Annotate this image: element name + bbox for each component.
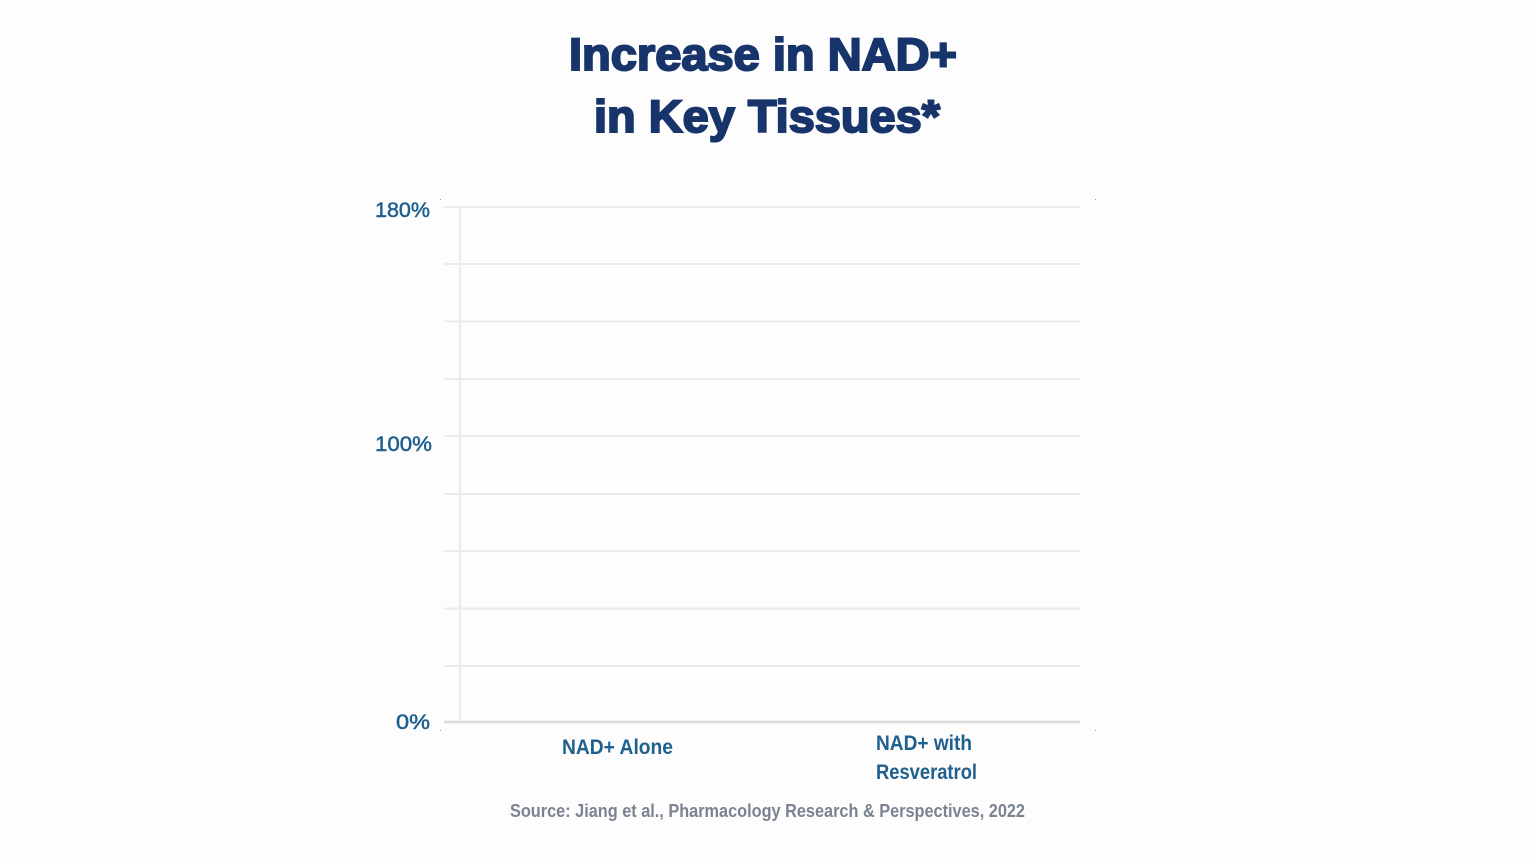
y-axis labels — [375, 199, 432, 734]
title — [569, 29, 957, 142]
y-axis labels: 100% — [375, 433, 432, 456]
y-axis labels: 0% — [396, 711, 430, 734]
title: in Key Tissues* — [594, 91, 940, 142]
x-axis label: NAD+ Alone: NAD+ Alone — [562, 736, 673, 759]
x-axis label: NAD+ with Resveratrol: NAD+ with — [876, 732, 972, 755]
source note: Source: Jiang et al., Pharmacology Research & Perspectives, 2022 — [510, 801, 1025, 821]
x-axis label: NAD+ with Resveratrol: Resveratrol — [876, 761, 977, 784]
x-axis label: NAD+ with Resveratrol — [876, 732, 977, 784]
y-axis labels: 180% — [375, 199, 430, 222]
title: Increase in NAD+ — [569, 29, 957, 80]
bar chart — [375, 199, 1096, 784]
